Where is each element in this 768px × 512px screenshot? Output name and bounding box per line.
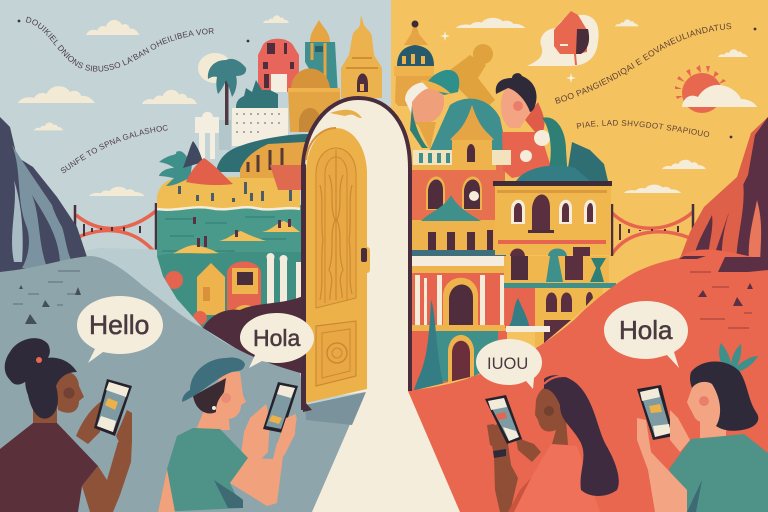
panel: right city collage	[412, 164, 616, 390]
phone	[94, 379, 132, 436]
right city top figures and towers	[394, 20, 608, 181]
palm tree	[208, 59, 246, 125]
sand islands	[172, 221, 300, 254]
neck	[33, 405, 57, 427]
lower arch building	[227, 262, 261, 310]
door	[303, 128, 370, 412]
bridge: right	[612, 204, 693, 256]
door lower carved panel	[316, 321, 356, 386]
face	[53, 372, 84, 413]
shadow on shirt	[687, 480, 702, 512]
domed tower	[394, 20, 434, 106]
person 3: woman with long hair	[485, 375, 619, 512]
left mountain	[0, 117, 88, 272]
clouds: right sky	[456, 18, 748, 193]
water	[157, 205, 305, 335]
shirt	[514, 444, 600, 512]
gold domed building	[288, 68, 340, 132]
left hand	[240, 404, 270, 470]
dark peak	[183, 141, 203, 168]
hair	[193, 378, 226, 413]
gold statue	[450, 44, 495, 112]
coral building	[258, 39, 299, 92]
rooftop plants	[566, 142, 608, 181]
door handle	[363, 247, 370, 273]
speech bubble: Hola (right)	[604, 301, 688, 368]
hair	[25, 358, 77, 419]
clouds: left sky	[18, 15, 289, 196]
yellow terrace	[240, 142, 305, 190]
teal leaf	[542, 117, 568, 181]
speech bubble: Hola (left)	[240, 313, 314, 368]
hair bun	[5, 338, 50, 385]
beach	[157, 176, 300, 210]
teal dome building	[412, 195, 506, 256]
coral shrub	[165, 271, 183, 289]
hair	[690, 362, 758, 431]
bridge: left	[75, 203, 156, 262]
leaf ornament	[719, 343, 758, 378]
panel: right sky background	[391, 0, 768, 512]
phone	[263, 382, 298, 433]
caption: left second curved text: SUNFE TO SPNA GALASHOC	[60, 125, 168, 174]
speech bubble: Hola (right): Hola	[619, 315, 673, 345]
sleeve shadow	[508, 478, 531, 512]
mountain feet right	[679, 256, 768, 272]
speech bubble: IUOU	[476, 339, 542, 389]
speech bubble: IUOU: IUOU	[487, 355, 528, 373]
door shadow	[305, 392, 366, 425]
panel: left sky background	[0, 0, 392, 512]
white columns	[266, 253, 301, 304]
speech bubble: Hola (left): Hola	[253, 325, 301, 351]
neck	[196, 408, 230, 430]
white building	[232, 108, 288, 146]
hat	[182, 357, 245, 402]
balustrade	[413, 105, 511, 165]
caption: left top curved text: DOUIKIEL DNIONS SIBUSSO LA'BAN OHEILIBEA VOR	[26, 16, 214, 72]
left city skyline	[159, 15, 382, 190]
sparkles	[440, 31, 576, 83]
shirt	[0, 423, 98, 512]
phone	[485, 395, 522, 444]
right hand	[514, 428, 541, 462]
arm	[489, 424, 518, 512]
icon: sun behind cloud	[675, 65, 757, 113]
coral building upper	[412, 164, 505, 391]
neck and face	[535, 386, 568, 445]
ground: right coral	[407, 256, 768, 512]
swimmers	[193, 217, 291, 247]
coral building lower	[411, 256, 508, 393]
icon: thought cloud with face	[527, 11, 599, 66]
speech bubble: Hello	[77, 296, 163, 363]
ground: left light hill	[0, 248, 305, 512]
yellow building	[493, 181, 612, 256]
ground marks: left	[13, 271, 81, 324]
white tower	[195, 112, 219, 159]
person 4: woman in teal shirt	[637, 343, 768, 512]
person 2: figure in teal shirt and hat	[158, 357, 298, 512]
arm	[637, 418, 687, 512]
arm	[230, 416, 297, 506]
teal trees	[216, 134, 308, 172]
white swirl behind figure	[405, 82, 432, 115]
door hinge edge	[303, 160, 312, 412]
neck	[700, 420, 726, 440]
hat figure	[410, 70, 510, 165]
panel: left city collage	[157, 176, 305, 373]
wave line	[157, 207, 300, 210]
caption: right top curved text: BOO PANGIENDIQAI E EOVANEULIANDATUS	[555, 23, 732, 104]
left hand	[76, 398, 108, 444]
bullet dots	[18, 20, 756, 138]
right fingers	[116, 410, 132, 448]
lower sand band	[157, 252, 305, 372]
lower domed building	[197, 263, 225, 315]
beach people	[178, 182, 292, 202]
dark hill	[203, 295, 305, 373]
red tent hill	[186, 158, 233, 185]
fingers	[487, 424, 502, 448]
doorway: cream path and arch	[303, 98, 460, 512]
ground: left slate	[0, 256, 366, 512]
right mountain	[680, 117, 768, 272]
green shrub	[236, 80, 278, 108]
yellow backdrop below buildings	[411, 256, 691, 396]
ground marks: right	[679, 250, 760, 328]
gold tower	[341, 15, 382, 98]
fingers	[277, 414, 296, 456]
phone	[637, 385, 674, 440]
arm	[82, 440, 132, 512]
speech bubble: Hello: Hello	[89, 310, 149, 340]
door upper carved panel	[316, 148, 356, 308]
watch	[493, 449, 506, 458]
face	[687, 380, 724, 423]
hair	[544, 375, 619, 496]
yellow building lower	[504, 256, 616, 348]
caption: right second curved text: PIAE, LAD SHVGDOT SPAPIOUO	[576, 120, 710, 137]
person 1: woman in maroon shirt	[0, 338, 132, 512]
teal fan palm	[159, 151, 192, 186]
other hand	[670, 410, 690, 452]
face	[212, 372, 246, 419]
water ripples	[162, 216, 286, 252]
shirt	[158, 428, 248, 512]
shirt	[669, 434, 768, 512]
teal tower	[305, 20, 338, 96]
woman figure	[496, 73, 552, 178]
